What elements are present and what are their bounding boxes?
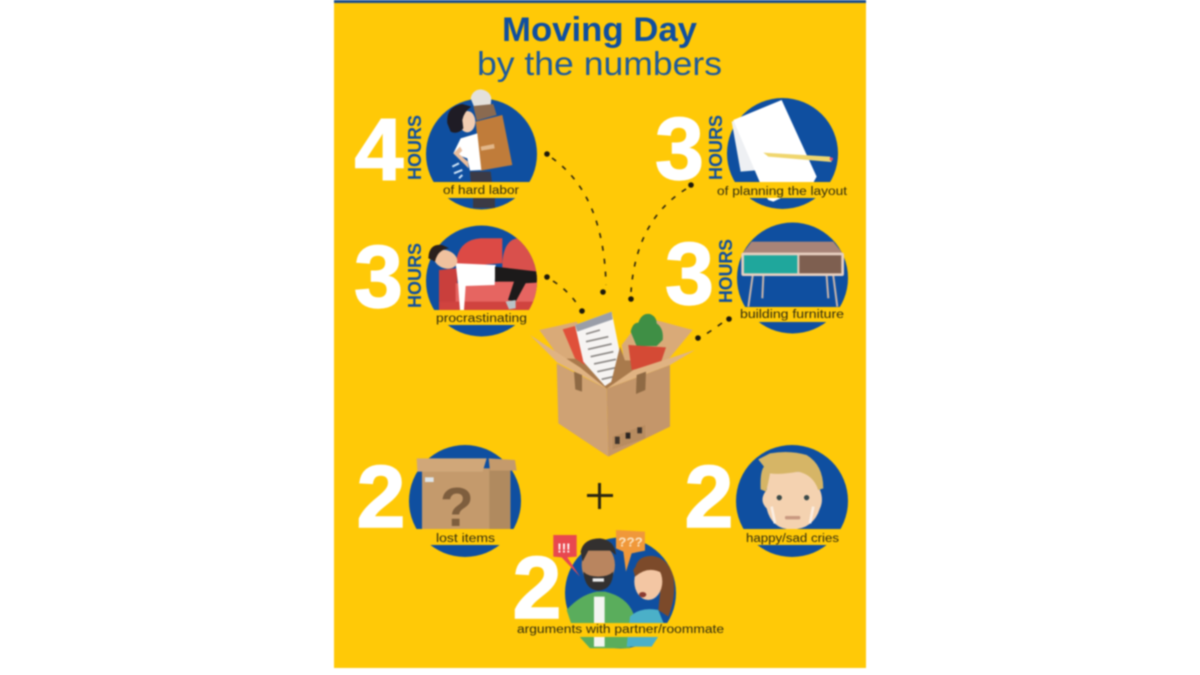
icon: sideboard table bbox=[741, 242, 844, 307]
stat: 3 hours of planning the layout: 3 bbox=[655, 99, 704, 198]
icon: plus sign bbox=[587, 483, 613, 509]
checklist bbox=[575, 312, 624, 386]
cactus in pot bbox=[628, 314, 666, 370]
label: happy/sad cries bbox=[746, 533, 839, 545]
stat: 3 hours of planning the layout bbox=[655, 98, 848, 209]
stat: 3 hours procrastinating bbox=[354, 226, 538, 336]
label: of hard labor bbox=[443, 185, 519, 197]
icon: person lying on red sofa bbox=[428, 238, 538, 310]
stat: 2 lost items: 2 bbox=[356, 447, 405, 546]
icon: notepad and pencil bbox=[732, 100, 833, 202]
icon: arguing couple: ??? bbox=[618, 535, 643, 550]
icon: mystery box: ? bbox=[440, 476, 474, 538]
title: by the numbers bbox=[477, 45, 722, 82]
icon: mystery box bbox=[417, 458, 517, 538]
stat: 4 hours of hard labor: 4 bbox=[354, 100, 404, 199]
icon: crying blond face bbox=[758, 452, 823, 529]
label: procrastinating bbox=[436, 313, 527, 325]
stat: 3 hours building furniture bbox=[665, 222, 848, 334]
stat: 2 happy/sad cries bbox=[684, 445, 848, 557]
title bbox=[477, 11, 722, 82]
red book bbox=[563, 326, 585, 365]
speech bubbles bbox=[553, 535, 580, 577]
stat: 3 hours building furniture: HOURS bbox=[716, 239, 736, 303]
stat: 3 hours of planning the layout: HOURS bbox=[706, 115, 726, 180]
stat: 2 arguments with partner/roommate: 2 bbox=[512, 538, 561, 637]
stat: 3 hours procrastinating: HOURS bbox=[405, 243, 425, 308]
label: lost items bbox=[436, 533, 495, 545]
stat: 4 hours of hard labor bbox=[354, 89, 537, 210]
stat: 3 hours building furniture: 3 bbox=[665, 224, 714, 323]
stat: 2 arguments with partner/roommate bbox=[512, 530, 726, 648]
stat: 3 hours procrastinating: 3 bbox=[354, 227, 403, 326]
label: of planning the layout bbox=[717, 186, 848, 198]
title: Moving Day bbox=[502, 11, 697, 49]
label: arguments with partner/roommate bbox=[517, 624, 724, 636]
icon: person carrying boxes bbox=[447, 89, 512, 203]
dashed arrows to box bbox=[544, 151, 732, 341]
icon: arguing couple: !!! bbox=[557, 541, 571, 556]
icon: open cardboard box with list and cactus bbox=[530, 312, 695, 457]
stat: 2 lost items bbox=[356, 445, 521, 557]
stat: 4 hours of hard labor: HOURS bbox=[405, 115, 425, 180]
panel: yellow poster background bbox=[334, 0, 866, 668]
label: building furniture bbox=[740, 309, 844, 321]
icon: arguing couple bbox=[553, 530, 674, 648]
stat: 2 happy/sad cries: 2 bbox=[684, 447, 733, 546]
